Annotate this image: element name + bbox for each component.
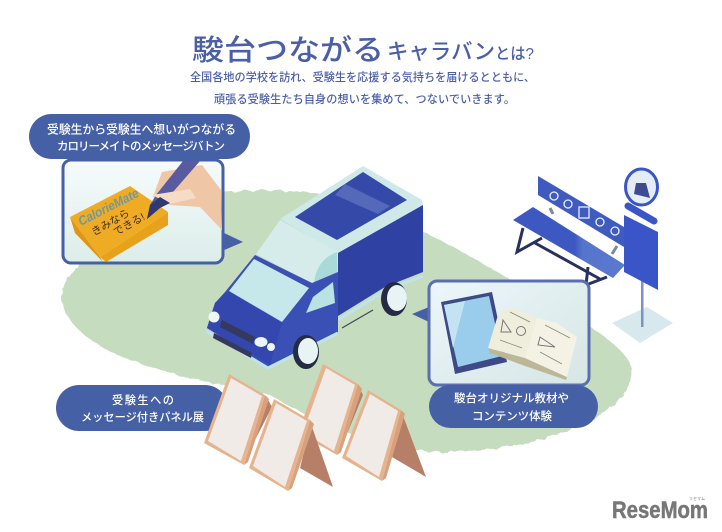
- sign base: [612, 307, 673, 343]
- card frame: [63, 160, 223, 263]
- pill: teaching materials label: [429, 385, 598, 428]
- cab body: [207, 255, 338, 367]
- icon: hand with pen: [147, 161, 222, 230]
- sign panel: [624, 215, 658, 290]
- pill: message baton label: [29, 114, 250, 159]
- panel back right: [342, 390, 426, 481]
- title: とは?: [495, 46, 534, 63]
- title: 駿台つながる: [192, 34, 384, 67]
- title: [192, 34, 534, 67]
- emblem icon: [634, 183, 650, 198]
- card pointer: [222, 232, 243, 251]
- backrest: [538, 176, 624, 247]
- seat: [513, 207, 625, 278]
- axle detail: [342, 310, 373, 328]
- bench: [513, 176, 625, 285]
- grille: [220, 320, 255, 344]
- logo: ReseMom: リセマム: [689, 496, 705, 501]
- backrest icons: [550, 192, 619, 235]
- icon: CalorieMate box: [70, 185, 168, 262]
- icon: CalorieMate box: CalorieMate: [76, 185, 141, 229]
- card pointer: [412, 307, 429, 322]
- cargo box: [338, 205, 423, 316]
- pill: panel exhibition label: 受験生への: [112, 393, 174, 407]
- panel back left: [298, 364, 363, 455]
- intro text: 頑張る受験生たち自身の想いを集めて、つないでいきます。: [214, 92, 515, 106]
- sign emblem: [626, 169, 658, 205]
- bus stop sign: [612, 169, 673, 343]
- under-body edge: [338, 276, 423, 320]
- card frame: [429, 281, 589, 385]
- icon: tablet: [441, 292, 507, 374]
- intro text: 全国各地の学校を訪れ、受験生を応援する気持ちを届けるとともに、: [190, 70, 535, 84]
- panel: teaching materials: [412, 281, 589, 385]
- panel front middle: [249, 399, 333, 491]
- logo: ReseMom: ReseMom: [612, 497, 708, 524]
- sign label: [628, 206, 654, 221]
- pill: panel exhibition label: メッセージ付きパネル展: [81, 411, 204, 424]
- pill: message baton label: 受験生から受験生へ想いがつながる: [47, 122, 236, 136]
- icon: CalorieMate box: できる!: [112, 211, 147, 239]
- front wheel: [293, 335, 319, 369]
- windshield: [229, 259, 309, 322]
- pill: message baton label: カロリーメイトのメッセージバトン: [57, 140, 225, 153]
- icon: open book: [488, 307, 577, 380]
- front fascia: [207, 291, 282, 365]
- panel: message baton: [63, 160, 243, 263]
- roof: [280, 166, 423, 253]
- cab roof shade: [314, 252, 337, 283]
- title: キャラバン: [387, 39, 495, 64]
- rear wheel: [381, 282, 407, 316]
- message panels: [204, 364, 426, 491]
- bumper trim: [206, 331, 338, 368]
- panel front left: [204, 374, 272, 465]
- intro text: [190, 70, 535, 106]
- door window: [306, 282, 335, 313]
- pill: teaching materials label: 駿台オリジナル教材や: [454, 391, 569, 405]
- headlights: [208, 312, 275, 351]
- pill: teaching materials label: コンテンツ体験: [472, 409, 552, 423]
- icon: CalorieMate box: きみなら: [90, 207, 132, 239]
- pill: panel exhibition label: [56, 385, 228, 431]
- solar panel: [295, 172, 407, 240]
- bumper: [213, 333, 252, 358]
- bench legs: [517, 208, 617, 285]
- cab roof: [256, 220, 338, 285]
- truck: [206, 166, 423, 369]
- green ground blob: [62, 190, 631, 452]
- pole: [641, 280, 644, 327]
